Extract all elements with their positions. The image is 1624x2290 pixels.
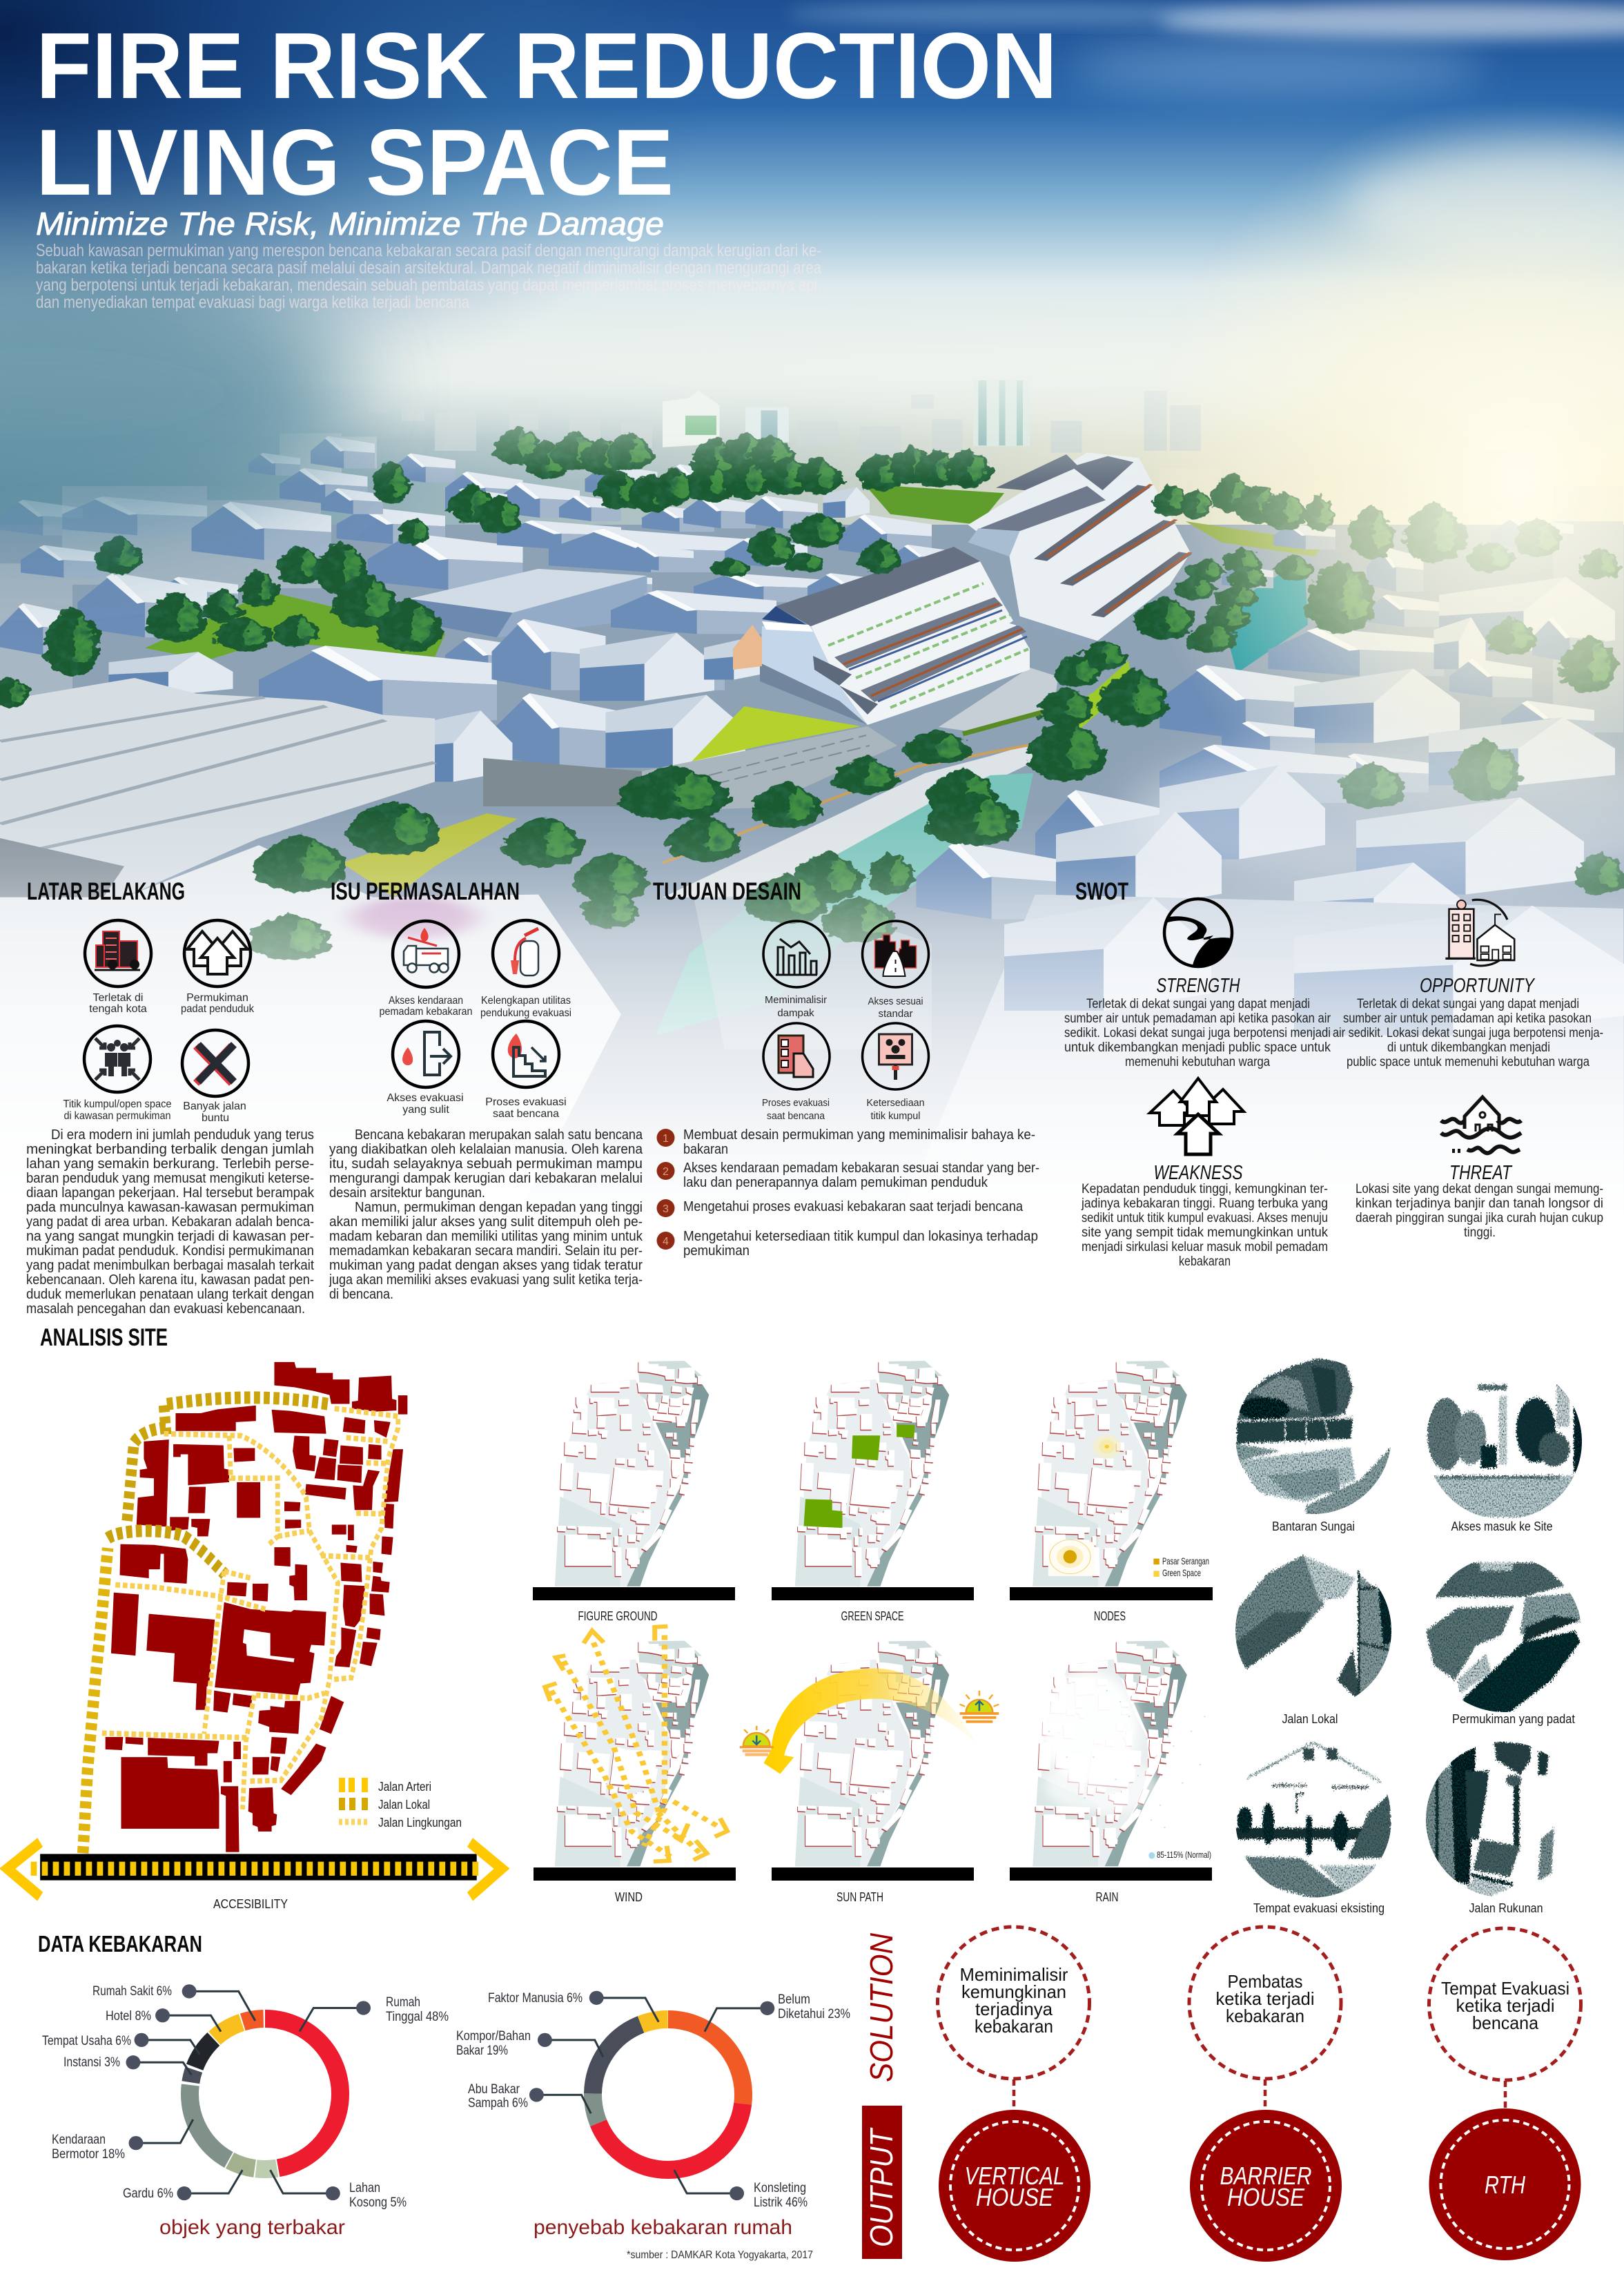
site analysis: figure ground xyxy=(533,1361,735,1623)
captions: Isu Permasalahan icons: Proses evakuasi xyxy=(485,1096,567,1108)
title xyxy=(36,13,1057,215)
text block: Latar Belakang: mukiman padat penduduk. Kondisi permukimanan xyxy=(26,1243,314,1259)
SWOT: threat xyxy=(1356,1162,1603,1240)
building group: left flat-roof block xyxy=(409,569,647,637)
SWOT: strength: STRENGTH xyxy=(1157,975,1240,997)
SWOT: weakness: Kepadatan penduduk tinggi, kemungkinan ter- xyxy=(1082,1182,1328,1196)
photo: Tempat evakuasi eksisting xyxy=(1235,1743,1392,1915)
captions: Isu Permasalahan icons: pendukung evakuasi xyxy=(480,1007,571,1019)
text block: Latar Belakang: meningkat berbanding terbalik dengan jumlah xyxy=(26,1142,314,1157)
captions: Isu Permasalahan icons: pemadam kebakaran xyxy=(380,1006,472,1018)
solution: Meminimalisir kemungkinan xyxy=(937,1927,1089,2079)
photo: Tempat evakuasi eksisting: Tempat evakuasi eksisting xyxy=(1253,1901,1385,1915)
SWOT: strength: sumber air untuk pemadaman api ketika pasokan air xyxy=(1064,1011,1331,1026)
captions: Tujuan Desain icons: standar xyxy=(878,1008,913,1020)
text block: Isu Permasalahan: madam kebaran dan memiliki utilitas yang minim untuk xyxy=(329,1229,643,1244)
photo: Akses masuk ke Site: Akses masuk ke Site xyxy=(1451,1520,1553,1533)
icon: stairs with fire xyxy=(493,1021,559,1087)
SWOT: weakness xyxy=(1081,1162,1328,1269)
solution: Meminimalisir kemungkinan: Meminimalisir xyxy=(959,1964,1068,1985)
connectors: solution to output xyxy=(1014,2079,1505,2109)
numbered design goals: 1 xyxy=(663,1133,669,1145)
photo: Permukiman yang padat xyxy=(1426,1563,1580,1726)
numbered design goals: Mengetahui ketersediaan titik kumpul dan lokasinya terhadap xyxy=(683,1229,1038,1244)
main building: rear block xyxy=(968,453,1191,645)
SWOT: threat: THREAT xyxy=(1449,1162,1513,1184)
photo: Jalan Rukunan xyxy=(1425,1740,1554,1915)
label: Solution: SOLUTION xyxy=(863,1932,899,2082)
text block: Isu Permasalahan: Namun, permukiman dengan kepadan yang tinggi xyxy=(355,1200,643,1215)
solution: Tempat Evakuasi xyxy=(1429,1928,1581,2080)
text block: Isu Permasalahan: itu, sudah selayaknya sebuah permukiman mampu xyxy=(329,1156,643,1172)
warehouse roofs xyxy=(0,678,435,897)
site analysis: rain xyxy=(1010,1641,1212,1904)
icon: impact chart xyxy=(763,921,830,987)
title: LIVING SPACE xyxy=(36,110,674,215)
text block: Isu Permasalahan xyxy=(329,1127,643,1302)
site analysis: nodes xyxy=(1010,1361,1213,1623)
donut chart: objek yang terbakar: Instansi 3% xyxy=(63,2055,120,2070)
icon: dead end cross xyxy=(182,1030,248,1096)
hero: aerial rendering of the settlement xyxy=(0,0,1624,1236)
site analysis: wind xyxy=(534,1627,736,1904)
SWOT: opportunity: Terletak di dekat sungai yang dapat menjadi xyxy=(1357,997,1579,1011)
donut chart: penyebab kebakaran rumah: Konsleting xyxy=(754,2181,806,2195)
icon: fire truck xyxy=(393,921,459,987)
captions: Latar Belakang icons: di kawasan permukiman xyxy=(63,1110,171,1122)
photo: Jalan Lokal xyxy=(1235,1555,1392,1726)
output: RTH: RTH xyxy=(1485,2171,1526,2199)
SWOT: opportunity xyxy=(1333,975,1603,1069)
donut chart: objek yang terbakar: Lahan xyxy=(349,2181,380,2195)
captions: Latar Belakang icons: Terletak di xyxy=(93,992,143,1004)
solution: Tempat Evakuasi: bencana xyxy=(1472,2012,1539,2033)
numbered design goals: Akses kendaraan pemadam kebakaran sesuai standar yang ber- xyxy=(683,1161,1039,1176)
text block: Latar Belakang: kebencanaan. Oleh karena itu, kawasan padat pen- xyxy=(26,1272,314,1288)
photo: Bantaran Sungai xyxy=(1235,1358,1392,1533)
icon: river circle xyxy=(1164,899,1232,967)
output: Barrier House: HOUSE xyxy=(1227,2183,1305,2211)
title: FIRE RISK REDUCTION xyxy=(36,13,1057,118)
donut chart: penyebab kebakaran rumah: Belum xyxy=(778,1992,810,2007)
numbered design goals: Membuat desain permukiman yang meminimalisir bahaya ke- xyxy=(683,1127,1035,1143)
donut chart: objek yang terbakar: Hotel 8% xyxy=(106,2009,151,2024)
solution: Pembatas: kebakaran xyxy=(1226,2006,1304,2026)
numbered design goals: 3 xyxy=(663,1203,669,1215)
lawn, plaza and walls around main building xyxy=(483,559,1308,1036)
numbered design goals: pemukiman xyxy=(683,1243,750,1259)
donut chart: penyebab kebakaran rumah: Bakar 19% xyxy=(456,2044,508,2058)
text block: Isu Permasalahan: mukiman yang padat dengan akses yang tidak teratur xyxy=(329,1258,643,1273)
label: Output: OUTPUT xyxy=(863,2127,899,2247)
SWOT: weakness: site yang sempit tidak memungkinkan untuk xyxy=(1082,1225,1328,1240)
tower: high rise xyxy=(973,379,1030,446)
solution: Tempat Evakuasi: Tempat Evakuasi xyxy=(1441,1978,1569,1999)
site analysis: green space xyxy=(772,1361,974,1623)
SWOT: weakness: jadinya kebakaran tinggi. Ruang terbuka yang xyxy=(1081,1196,1328,1211)
SWOT: weakness: sedikit untuk titik kumpul evakuasi. Akses menuju xyxy=(1082,1211,1328,1225)
heading: Analisis Site: ANALISIS SITE xyxy=(40,1324,168,1351)
solution: Pembatas: Pembatas xyxy=(1227,1971,1303,1992)
tower: green-striped block xyxy=(663,391,789,447)
captions: Tujuan Desain icons: Meminimalisir xyxy=(765,994,827,1006)
icon: evacuation checklist xyxy=(763,1023,830,1089)
captions: Latar Belakang icons: Titik kumpul/open space xyxy=(63,1098,172,1110)
SWOT: threat: kinkan terjadinya banjir dan tanah longsor di xyxy=(1356,1196,1603,1211)
intro paragraph: yang berpotensi untuk terjadi kebakaran, mendesain sebuah pembatas yang dapat memperlambat proses menyebarnya api, xyxy=(36,275,821,295)
text block: Isu Permasalahan: yang diakibatkan oleh kelalaian manusia. Oleh karena xyxy=(329,1142,643,1157)
SWOT: weakness: WEAKNESS xyxy=(1154,1162,1243,1184)
SWOT: strength: sedikit. Lokasi dekat sungai juga berpotensi menjadi xyxy=(1064,1026,1331,1040)
site analysis: nodes: Pasar Serangan xyxy=(1162,1555,1209,1566)
flowering shrubs xyxy=(352,897,476,939)
site analysis: figure ground: FIGURE GROUND xyxy=(578,1609,658,1623)
site analysis: rain: RAIN xyxy=(1096,1890,1118,1904)
SWOT: opportunity: public space untuk memenuhi kebutuhan warga xyxy=(1347,1055,1589,1069)
icon: assembly sign xyxy=(863,1023,929,1089)
SWOT: opportunity: sumber air untuk pemadaman api ketika pasokan xyxy=(1343,1011,1592,1026)
text block: Latar Belakang xyxy=(26,1127,315,1317)
text block: Isu Permasalahan: di bencana. xyxy=(329,1287,393,1302)
captions: Latar Belakang icons xyxy=(63,992,255,1124)
text block: Latar Belakang: yang padat menimbulkan berbagai masalah terkait xyxy=(26,1258,314,1273)
road legend: Jalan Arteri xyxy=(378,1780,431,1794)
donut chart: objek yang terbakar: objek yang terbakar xyxy=(159,2216,345,2239)
source note: *sumber : DAMKAR Kota Yogyakarta, 2017 xyxy=(627,2249,813,2261)
icon: fire extinguisher xyxy=(493,920,559,987)
captions: Isu Permasalahan icons: Kelengkapan utilitas xyxy=(481,995,571,1007)
SWOT: strength xyxy=(1064,975,1331,1069)
captions: Isu Permasalahan icons xyxy=(380,995,571,1120)
captions: Tujuan Desain icons: Proses evakuasi xyxy=(762,1097,830,1109)
output: RTH xyxy=(1429,2108,1581,2260)
numbered design goals: 4 xyxy=(663,1236,669,1248)
intro paragraph: Sebuah kawasan permukiman yang merespon bencana kebakaran secara pasif dengan mengurangi dampak kerugian dari ke- xyxy=(36,241,821,260)
icon: clustered houses xyxy=(1150,1078,1244,1154)
output: Vertical House: HOUSE xyxy=(976,2183,1054,2211)
site analysis: sun path xyxy=(740,1641,999,1904)
donut chart: penyebab kebakaran rumah: Sampah 6% xyxy=(468,2096,528,2111)
numbered design goals xyxy=(657,1127,1039,1259)
donut chart: penyebab kebakaran rumah: penyebab kebakaran rumah xyxy=(534,2216,792,2239)
site analysis: rain: 85-115% (Normal) xyxy=(1157,1850,1211,1860)
captions: Isu Permasalahan icons: saat bencana xyxy=(493,1108,559,1120)
solution: Meminimalisir kemungkinan: kemungkinan xyxy=(961,1981,1066,2002)
SWOT: strength: Terletak di dekat sungai yang dapat menjadi xyxy=(1086,997,1310,1011)
solution: Pembatas: ketika terjadi xyxy=(1216,1988,1314,2009)
solution: Tempat Evakuasi: ketika terjadi xyxy=(1456,1995,1554,2016)
SWOT: threat: tinggi. xyxy=(1464,1225,1496,1240)
heading: Isu Permasalahan: ISU PERMASALAHAN xyxy=(331,878,520,905)
captions: Latar Belakang icons: Banyak jalan xyxy=(183,1100,246,1112)
accessibility road bar with arrows xyxy=(8,1843,502,1896)
text block: Isu Permasalahan: juga akan memiliki akses evakuasi yang sulit ketika terja- xyxy=(329,1272,643,1288)
site analysis: green space: GREEN SPACE xyxy=(841,1609,904,1623)
captions: Tujuan Desain icons: dampak xyxy=(777,1007,814,1019)
text block: Latar Belakang: baran penduduk yang memusat mengikuti keterse- xyxy=(26,1171,314,1186)
solution: Pembatas xyxy=(1189,1927,1341,2079)
intro paragraph: bakaran ketika terjadi bencana secara pasif melalui desain arsitektural. Dampak negatif diminimalisir dengan mengurangi area xyxy=(36,258,821,278)
solution: Meminimalisir kemungkinan: terjadinya xyxy=(975,1999,1053,2019)
donut chart: penyebab kebakaran rumah xyxy=(456,1991,850,2239)
SWOT: threat: daerah pinggiran sungai jika curah hujan cukup xyxy=(1356,1211,1603,1225)
donut chart: objek yang terbakar: Rumah Sakit 6% xyxy=(92,1984,172,1999)
text block: Isu Permasalahan: akan memiliki jalur akses yang sulit ditempuh oleh pe- xyxy=(329,1214,643,1230)
site analysis: nodes: Green Space xyxy=(1162,1567,1201,1578)
icon: flooded house xyxy=(1441,1097,1521,1153)
captions: Latar Belakang icons: buntu xyxy=(202,1112,229,1124)
photo: Bantaran Sungai: Bantaran Sungai xyxy=(1272,1520,1355,1533)
main building: front block xyxy=(733,547,1030,725)
heading: SWOT: SWOT xyxy=(1075,878,1128,905)
donut chart: objek yang terbakar: Rumah xyxy=(386,1995,420,2010)
donut chart: penyebab kebakaran rumah: Faktor Manusia 6% xyxy=(488,1991,583,2006)
captions: Latar Belakang icons: padat penduduk xyxy=(181,1003,255,1015)
accessibility site map xyxy=(83,1362,407,1853)
captions: Isu Permasalahan icons: Akses kendaraan xyxy=(389,995,463,1007)
SWOT: opportunity: OPPORTUNITY xyxy=(1420,975,1536,997)
output: Barrier House xyxy=(1190,2110,1342,2262)
intro paragraph xyxy=(36,241,821,312)
icon: assembly point xyxy=(84,1026,150,1092)
numbered design goals: 2 xyxy=(663,1166,669,1178)
donut chart: penyebab kebakaran rumah: Listrik 46% xyxy=(754,2195,808,2210)
road legend xyxy=(339,1778,462,1830)
heading: Data Kebakaran: DATA KEBAKARAN xyxy=(38,1931,202,1957)
donut chart: objek yang terbakar xyxy=(42,1984,449,2239)
donut chart: objek yang terbakar: Kendaraan xyxy=(52,2133,106,2147)
text block: Latar Belakang: pada munculnya kawasan-kawasan permukiman xyxy=(26,1200,314,1215)
SWOT: weakness: kebakaran xyxy=(1179,1254,1231,1269)
green lawns xyxy=(145,484,1325,660)
captions: Tujuan Desain icons: Akses sesuai xyxy=(868,996,923,1007)
text block: Latar Belakang: Di era modern ini jumlah penduduk yang terus xyxy=(51,1127,314,1143)
heading: Latar Belakang: LATAR BELAKANG xyxy=(27,878,185,905)
output: Vertical House: VERTICAL xyxy=(965,2162,1064,2190)
road legend: Jalan Lingkungan xyxy=(378,1816,462,1830)
site analysis: nodes: NODES xyxy=(1094,1609,1126,1623)
donut chart: penyebab kebakaran rumah: Kompor/Bahan xyxy=(456,2029,531,2044)
icon: hospital and school xyxy=(1445,900,1514,966)
SWOT: weakness: menjadi sirkulasi keluar masuk mobil pemadam xyxy=(1082,1240,1328,1254)
icon: dense houses xyxy=(184,920,251,987)
SWOT: strength: untuk dikembangkan menjadi public space untuk xyxy=(1064,1040,1331,1055)
donut chart: objek yang terbakar: Kosong 5% xyxy=(349,2195,407,2210)
photo: Jalan Rukunan: Jalan Rukunan xyxy=(1469,1901,1543,1915)
text block: Latar Belakang: duduk memerlukan penataan ulang terkait dengan xyxy=(26,1287,314,1302)
captions: Tujuan Desain icons xyxy=(762,994,925,1122)
accessibility caption: ACCESIBILITY xyxy=(213,1897,288,1911)
text block: Latar Belakang: na yang sangat mungkin terjadi di kawasan per- xyxy=(26,1229,314,1244)
text block: Latar Belakang: lahan yang semakin berkurang. Terlebih perse- xyxy=(26,1156,314,1172)
captions: Tujuan Desain icons: saat bencana xyxy=(767,1110,825,1122)
donut chart: penyebab kebakaran rumah: Abu Bakar xyxy=(468,2082,520,2097)
numbered design goals: Mengetahui proses evakuasi kebakaran saat terjadi bencana xyxy=(683,1199,1024,1214)
icon: city xyxy=(85,920,151,987)
text block: Latar Belakang: yang padat di area urban. Kebakaran adalah benca- xyxy=(26,1214,314,1230)
output: Barrier House: BARRIER xyxy=(1220,2162,1311,2190)
trees xyxy=(0,426,1624,960)
right houses xyxy=(917,517,1615,940)
icon: evacuation exit xyxy=(393,1021,459,1087)
text block: Isu Permasalahan: mengurangi dampak kerugian dari kebakaran melalui xyxy=(329,1171,643,1186)
SWOT: opportunity: di untuk dikembangkan menjadi xyxy=(1387,1040,1550,1055)
captions: Tujuan Desain icons: Ketersediaan xyxy=(867,1097,925,1109)
site analysis: wind: WIND xyxy=(615,1890,643,1904)
subtitle: Minimize The Risk, Minimize The Damage xyxy=(36,206,664,242)
photo: Akses masuk ke Site xyxy=(1426,1381,1584,1533)
output: Vertical House xyxy=(939,2110,1090,2262)
text block: Latar Belakang: masalah pencegahan dan evakuasi kebencanaan. xyxy=(26,1301,305,1317)
solution: Meminimalisir kemungkinan: kebakaran xyxy=(975,2016,1053,2037)
road legend: Jalan Lokal xyxy=(378,1798,430,1812)
numbered design goals: bakaran xyxy=(683,1142,728,1157)
heading: Tujuan Desain: TUJUAN DESAIN xyxy=(653,878,801,905)
captions: Tujuan Desain icons: titik kumpul xyxy=(871,1110,921,1122)
photo: Jalan Lokal: Jalan Lokal xyxy=(1282,1712,1338,1726)
SWOT: strength: memenuhi kebutuhan warga xyxy=(1125,1055,1270,1069)
site analysis: sun path: SUN PATH xyxy=(837,1890,883,1904)
donut chart: objek yang terbakar: Tempat Usaha 6% xyxy=(42,2034,131,2048)
captions: Latar Belakang icons: tengah kota xyxy=(89,1003,147,1015)
photo: Permukiman yang padat: Permukiman yang padat xyxy=(1452,1712,1575,1726)
text block: Isu Permasalahan: desain arsitektur bangunan. xyxy=(329,1185,485,1201)
icon: standard road xyxy=(863,921,929,987)
text block: Latar Belakang: diaan lapangan pekerjaan. Hal tersebut berampak xyxy=(26,1185,315,1201)
captions: Isu Permasalahan icons: yang sulit xyxy=(402,1104,449,1116)
donut chart: penyebab kebakaran rumah: Diketahui 23% xyxy=(778,2007,850,2021)
numbered design goals: laku dan penerapannya dalam pemukiman penduduk xyxy=(683,1175,988,1190)
donut chart: objek yang terbakar: Gardu 6% xyxy=(123,2186,173,2201)
lower walkway and plaza xyxy=(0,813,1623,1215)
captions: Isu Permasalahan icons: Akses evakuasi xyxy=(387,1092,464,1104)
text block: Isu Permasalahan: Bencana kebakaran merupakan salah satu bencana xyxy=(355,1127,643,1143)
intro paragraph: dan menyediakan tempat evakuasi bagi warga ketika terjadi bencana xyxy=(36,293,469,312)
text block: Isu Permasalahan: memadamkan kebakaran secara mandiri. Selain itu per- xyxy=(329,1243,643,1259)
donut chart: objek yang terbakar: Bermotor 18% xyxy=(52,2147,125,2162)
donut chart: objek yang terbakar: Tinggal 48% xyxy=(386,2010,449,2024)
captions: Latar Belakang icons: Permukiman xyxy=(186,992,248,1004)
